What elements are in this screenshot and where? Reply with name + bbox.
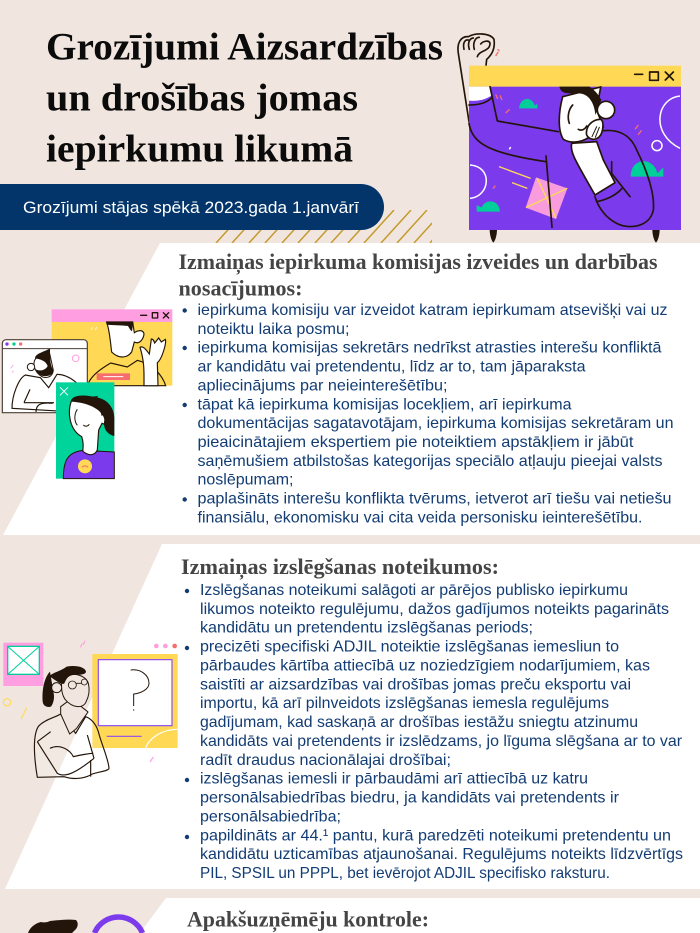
illustration: person and ring: [28, 917, 142, 933]
list: komisija: tāpat kā iepirkuma komisijas locekļiem, arī iepirkuma: [198, 396, 572, 413]
panel: apakšuzņēmēji: [140, 898, 700, 933]
list: izslegsana: Izslēgšanas noteikumi salāgoti ar pārējos publisko iepirkumu: [200, 582, 628, 599]
heading: apakšuzņēmēji: Apakšuzņēmēju kontrole:: [187, 907, 429, 933]
icon: yellow window: [52, 309, 172, 386]
title: iepirkumu likumā: [46, 128, 353, 171]
icon: window title bar: [469, 66, 681, 87]
list: izslegsana: PIL, SPSIL un PPPL, bet ievērojot ADJIL specifisko raksturu.: [200, 865, 610, 882]
heading: izslegsana: Izmaiņas izslēgšanas noteikumos:: [181, 554, 499, 580]
list: komisija: saņēmušiem atbilstošas kategorijas speciālo atļauju pieejai valsts: [198, 453, 662, 470]
list: izslegsana: kandidātu uzticamības atjaunošanai. Regulējums noteikts līdzvērtīgs: [200, 846, 683, 863]
illustration: woman thinking: [3, 641, 178, 778]
list: komisija: finansiālu, ekonomisku vai cita veida personisku ieinterešētību.: [198, 509, 642, 526]
icon: green domes: [477, 99, 663, 212]
list: komisija: ar kandidātu vai pretendentu, līdz ar to, tam jāparaksta: [198, 359, 586, 376]
list: izslegsana: pārbaudes kārtība attiecībā uz noziedzīgiem nodarījumiem, kas: [200, 658, 650, 674]
list: komisija: noteiktu laika posmu;: [198, 321, 350, 338]
list: komisija: dokumentācijas sagatavotājam, iepirkuma komisijas sekretāram un: [198, 415, 674, 432]
list: komisija: [182, 302, 674, 526]
icon: decorative dots: [154, 644, 177, 648]
illustration: man at window with raised fist: [458, 34, 681, 243]
banner: Grozījumi stājas spēkā 2023.gada 1.janvārī: [23, 198, 359, 217]
icon: salmon ticks: [493, 49, 642, 189]
list: komisija: apliecinājums par neieinterešētību;: [198, 377, 448, 394]
list: izslegsana: saistīti ar aizsardzības vai drošības jomas preču eksportu vai: [200, 676, 631, 693]
heading: komisija: Izmaiņas iepirkuma komisijas izveides un darbības: [178, 249, 658, 275]
panel: komisija: [2, 243, 700, 535]
heading: komisija: nosacījumos:: [178, 276, 302, 300]
icon: raised arm: [469, 87, 558, 227]
icon: image placeholder: [3, 643, 43, 686]
heading: komisija: [178, 249, 658, 300]
banner: [0, 184, 384, 230]
title: un drošības jomas: [46, 77, 358, 120]
list: izslegsana: kandidātu un pretendentu izslēgšanas periods;: [200, 620, 533, 637]
list: izslegsana: personālsabiedrības biedru, ja kandidāts vai pretendents ir: [200, 790, 620, 807]
title: [46, 26, 443, 171]
list: izslegsana: precizēti specifiski ADJIL noteiktie izslēgšanas iemesliun to: [200, 639, 619, 656]
list: komisija: paplašināts interešu konflikta tvērums, ietverot arī tiešu vai netiešu: [198, 490, 672, 508]
icon: confetti: [3, 641, 153, 762]
icon: man torso: [595, 130, 654, 227]
list: komisija: iepirkuma komisiju var izveidot katram iepirkumam atsevišķi vai uz: [198, 302, 668, 319]
list: izslegsana: [185, 582, 683, 882]
icon: window controls: [635, 72, 673, 80]
icon: question window: [92, 654, 178, 748]
illustration: video call windows: [2, 309, 172, 479]
list: izslegsana: kandidāts vai pretendents ir izslēdzams, jo līguma slēgšana ar to var: [200, 733, 683, 750]
icon: man forearm: [571, 142, 622, 202]
icon: speed lines: [499, 167, 531, 188]
list: komisija: iepirkuma komisijas sekretārs nedrīkst atrasties interešu konfliktā: [198, 340, 662, 357]
hatch pattern: [216, 210, 432, 243]
icon: woman window: [56, 382, 114, 479]
icon: white arcs: [470, 96, 680, 198]
list: izslegsana: gadījumam, kad saskaņā ar drošības iestāžu sniegtu atzinumu: [200, 714, 638, 731]
icon: bearded man window: [2, 340, 87, 413]
icon: window body: [469, 87, 681, 230]
list: izslegsana: personālsabiedrība;: [200, 808, 341, 825]
title: Grozījumi Aizsardzības: [46, 26, 443, 68]
list: izslegsana: radīt draudus nacionālajai drošībai;: [200, 752, 451, 769]
icon: pink envelope: [526, 177, 567, 219]
list: izslegsana: papildināts ar 44.¹ pantu, kurā paredzēti noteikumi pretendentu un: [200, 827, 671, 844]
icon: woman with crossed arms: [34, 666, 109, 778]
list: komisija: pieaicinātajiem ekspertiem pie noteiktiem apstākļiem ir jābūt: [198, 434, 634, 451]
list: komisija: noslēpumam;: [198, 472, 294, 489]
panel: izslegsana: [3, 544, 700, 889]
list: izslegsana: likumos noteikto regulējumu, dažos gadījumos noteikts pagarināts: [200, 601, 669, 618]
icon: window legs: [490, 229, 660, 243]
list: izslegsana: importu, kā arī pilnveidots izslēgšanas iemesla regulējums: [200, 695, 609, 712]
list: izslegsana: izslēgšanas iemesli ir pārbaudāmi arī attiecībā uz katru: [200, 771, 588, 788]
icon: raised fist: [458, 34, 494, 122]
icon: man head: [559, 87, 615, 142]
